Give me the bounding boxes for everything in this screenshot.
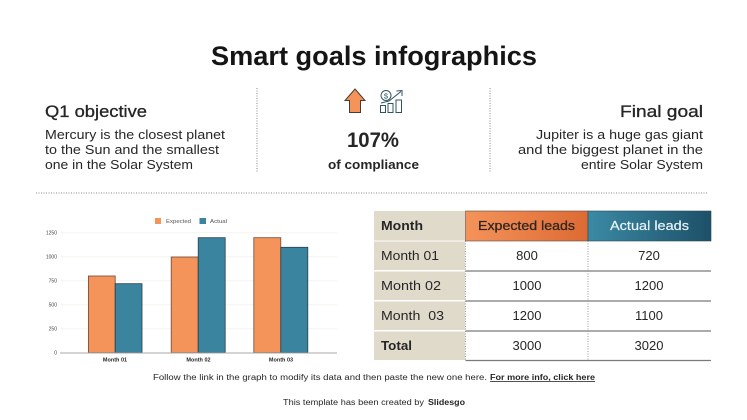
x axis labels: Month 02 (186, 358, 211, 364)
bars: Expected (88, 238, 281, 353)
credit: This template has been created by (283, 398, 424, 407)
chart legend (155, 218, 227, 225)
text block: final goal description (518, 127, 703, 172)
chart legend: Expected (166, 219, 191, 225)
chart legend: Actual (210, 219, 227, 225)
table values: 3020 (635, 338, 663, 353)
footnote: For more info, click here (490, 373, 596, 382)
table row labels (374, 211, 465, 360)
y axis labels: 1000 (46, 254, 57, 260)
table column headers text (478, 218, 690, 233)
table first column text: Month 03 (381, 308, 444, 323)
table values: 1000 (513, 278, 541, 293)
y axis labels: 500 (49, 302, 57, 308)
table first column text: Month 02 (381, 278, 441, 293)
table header: Actual leads (588, 211, 711, 241)
y axis labels: 750 (49, 278, 57, 284)
y axis labels: 0 (54, 350, 57, 356)
table values: 1200 (513, 308, 541, 323)
y axis labels (46, 230, 57, 356)
icon: growth chart: $ (384, 91, 389, 100)
table header: Expected leads (466, 211, 588, 241)
table (374, 211, 711, 361)
x axis labels: Month 01 (103, 358, 127, 364)
text block: final goal description: and the biggest planet in the (518, 142, 703, 157)
table first column text: Month (381, 218, 423, 233)
table first column text: Month 01 (381, 248, 439, 263)
panel: final goal (518, 103, 703, 172)
heading: Final goal: Final goal (620, 103, 703, 121)
x axis labels (103, 358, 293, 364)
table column headers text: Expected leads (478, 218, 576, 233)
x axis labels: Month 03 (269, 358, 293, 364)
table values: 3000 (513, 338, 541, 353)
metric: 107%: 107% (347, 129, 399, 152)
panel: Q1 objective (45, 103, 225, 172)
table first column text (381, 218, 444, 353)
table values: 800 (516, 248, 538, 263)
table values: 720 (638, 248, 660, 263)
footnote: Follow the link in the graph to modify its data and then paste the new one here. (153, 373, 487, 382)
bars: Actual (115, 238, 308, 353)
table column headers text: Actual leads (610, 218, 690, 233)
credit (283, 398, 465, 407)
text block: final goal description: Jupiter is a huge gas giant (536, 127, 703, 142)
table first column text: Total (381, 338, 412, 353)
table values: 1200 (635, 278, 663, 293)
footnote (153, 373, 596, 382)
text block: final goal description: entire Solar System (581, 157, 703, 172)
table values: 1100 (635, 308, 663, 323)
heading: Q1 objective: Q1 objective (45, 103, 147, 121)
y axis labels: 250 (49, 326, 57, 332)
panel: compliance (328, 89, 419, 172)
bar chart (46, 218, 337, 364)
text block: Q1 description: one in the Solar System (45, 157, 193, 172)
title: Smart goals infographics (211, 41, 537, 71)
y axis labels: 1250 (46, 230, 57, 236)
icon: up arrow (345, 89, 365, 112)
text block: Q1 description: Mercury is the closest planet (45, 127, 225, 142)
label: of compliance: of compliance (328, 157, 419, 172)
table values (513, 248, 663, 353)
credit: Slidesgo (428, 398, 465, 407)
text block: Q1 description (45, 127, 225, 172)
text block: Q1 description: to the Sun and the smallest (45, 142, 219, 157)
